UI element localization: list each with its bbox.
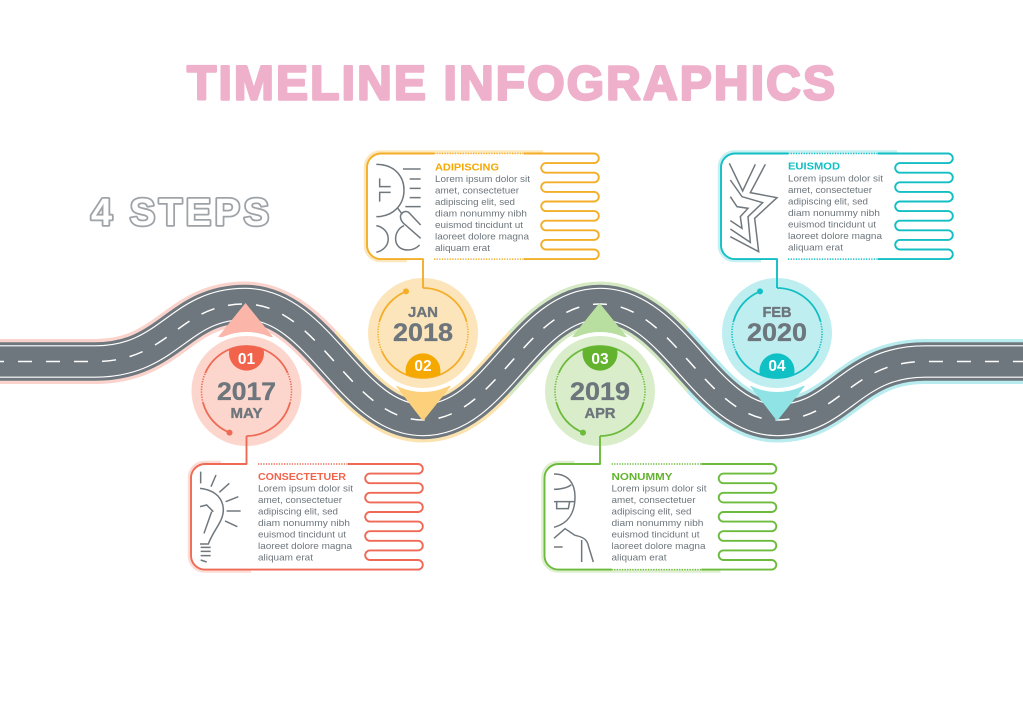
panel text: Lorem ipsum dolor sit: [612, 482, 707, 494]
circle 1: 01: [238, 351, 255, 368]
step 4 marker: [718, 274, 836, 421]
panel heading: CONSECTETUER: [258, 471, 346, 483]
panel heading: NONUMMY: [612, 471, 672, 483]
panel text: amet, consectetuer: [788, 184, 872, 195]
panel text: adipiscing elit, sed: [435, 196, 515, 207]
panel text: diam nonummy nibh: [435, 208, 527, 218]
circle 1: [188, 332, 306, 450]
panel: euismod: [719, 152, 953, 288]
circle 2: 02: [414, 358, 432, 375]
panel text: laoreet dolore magna: [612, 540, 706, 551]
panel: consectetuer: [189, 436, 423, 571]
icon: star: [729, 163, 777, 252]
panel text: aliquam erat: [435, 242, 490, 253]
circle 4: FEB: [762, 305, 792, 321]
panel text: euismod tincidunt ut: [435, 219, 523, 230]
panel text: amet, consectetuer: [258, 494, 342, 505]
circle 4: 2020: [747, 319, 807, 347]
panel text: aliquam erat: [612, 552, 667, 562]
panel text: adipiscing elit, sed: [612, 506, 692, 516]
arrow 3: [572, 303, 627, 337]
arrow 1: [218, 303, 273, 337]
panel: nonummy: [543, 436, 776, 571]
circle 1: 2017: [217, 378, 276, 406]
panel text: diam nonummy nibh: [612, 517, 704, 528]
panel text: [258, 482, 353, 562]
arrow 4: [750, 386, 805, 421]
circle 3: 03: [591, 351, 609, 368]
icon: magnifier: [376, 164, 421, 252]
winding road: [0, 304, 1023, 420]
panel text: Lorem ipsum dolor sit: [258, 482, 353, 494]
circle 3: [541, 332, 659, 450]
panel text: Lorem ipsum dolor sit: [788, 172, 883, 184]
panel text: euismod tincidunt ut: [788, 218, 876, 230]
icon: light bulb: [200, 472, 241, 562]
panel text: [435, 173, 530, 253]
panel text: [612, 482, 707, 562]
icon: person with glasses: [554, 474, 593, 562]
circle 4: [718, 274, 836, 392]
panel text: [788, 172, 883, 252]
panel text: laoreet dolore magna: [788, 230, 883, 241]
panel text: adipiscing elit, sed: [788, 196, 868, 206]
panel text: Lorem ipsum dolor sit: [435, 173, 530, 184]
title: TIMELINE INFOGRAPHICS: [187, 58, 835, 110]
panel text: amet, consectetuer: [435, 184, 519, 196]
panel text: laoreet dolore magna: [435, 230, 530, 242]
panel heading: EUISMOD: [788, 160, 840, 172]
panel text: laoreet dolore magna: [258, 540, 353, 551]
panel text: euismod tincidunt ut: [612, 528, 700, 540]
circle 2: JAN: [408, 305, 438, 321]
circle 3: APR: [584, 406, 616, 422]
step 1 marker: [188, 303, 306, 450]
circle 2: 2018: [393, 319, 453, 347]
panel text: aliquam erat: [788, 242, 843, 252]
panel text: euismod tincidunt ut: [258, 528, 346, 540]
subtitle: 4 steps: 4 STEPS: [91, 192, 269, 234]
circle 3: 2019: [570, 378, 630, 406]
step 2 marker: [364, 274, 482, 421]
panel text: adipiscing elit, sed: [258, 506, 338, 516]
panel text: aliquam erat: [258, 552, 313, 562]
panel heading: ADIPISCING: [435, 162, 499, 174]
step 3 marker: [541, 303, 659, 450]
circle 1: MAY: [230, 406, 263, 422]
circle 4: 04: [768, 358, 786, 375]
arrow 2: [396, 386, 451, 421]
panel: adipiscing: [365, 152, 599, 288]
panel text: amet, consectetuer: [612, 494, 696, 505]
circle 2: [364, 274, 482, 392]
panel text: diam nonummy nibh: [258, 517, 350, 528]
panel text: diam nonummy nibh: [788, 207, 880, 218]
